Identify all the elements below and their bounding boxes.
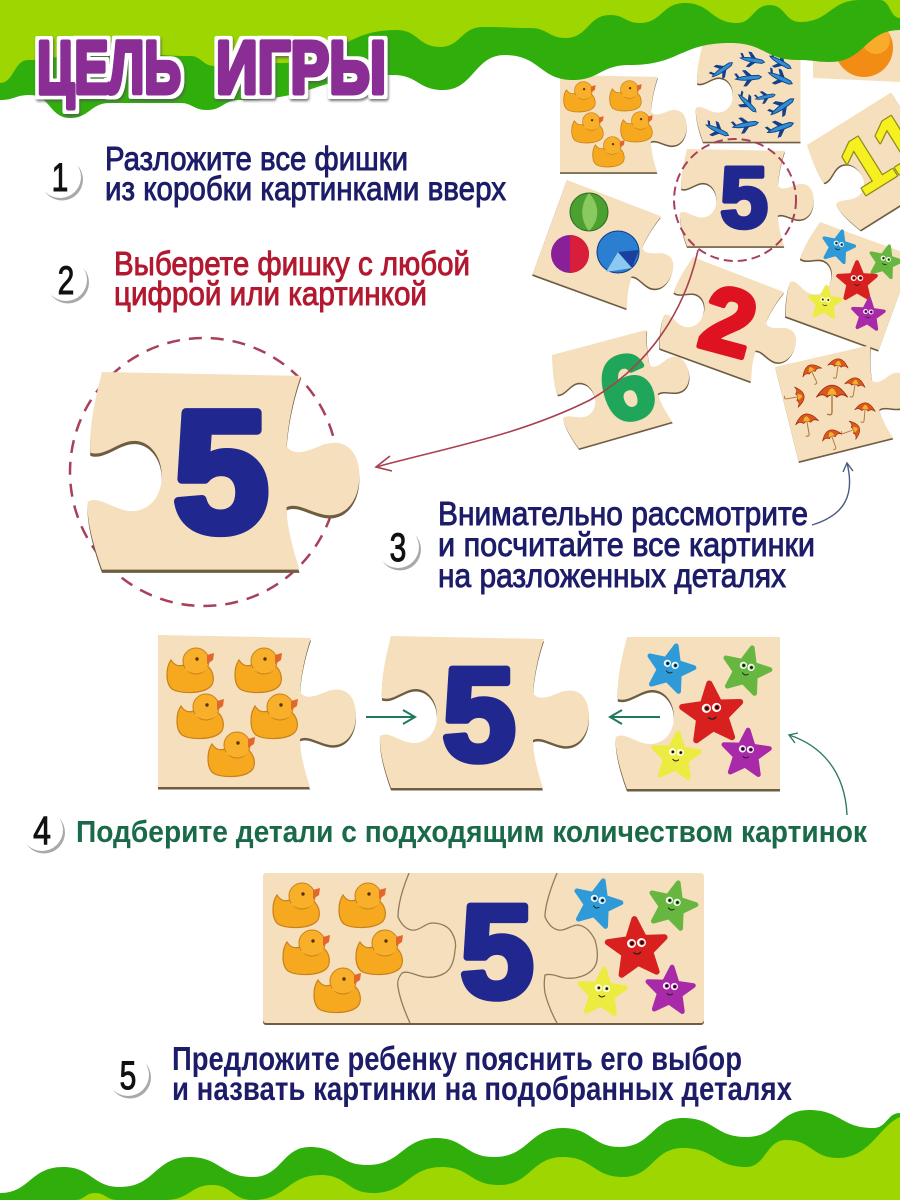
curved arrow to starfish piece bbox=[789, 733, 847, 815]
step 1 text: из коробки картинками вверх bbox=[105, 170, 506, 207]
step 2 bbox=[45, 245, 470, 312]
puzzle piece: airplanes bbox=[696, 43, 800, 143]
step 5 bbox=[107, 1040, 793, 1107]
puzzle piece: number 6 bbox=[545, 320, 701, 452]
arrow left bbox=[610, 710, 660, 724]
title: ЦЕЛЬ bbox=[37, 26, 181, 109]
number 5 piece: 5 bbox=[442, 641, 516, 788]
step 4 number badge: 4 bbox=[33, 808, 51, 853]
puzzle piece: highlighted number 5: 5 bbox=[720, 150, 768, 246]
step 1 text bbox=[105, 140, 506, 207]
enlarged puzzle piece with number 5 bbox=[88, 372, 359, 573]
duck piece bbox=[158, 635, 356, 790]
step 2 text: цифрой или картинкой bbox=[114, 275, 427, 312]
top wave: light green bbox=[0, 0, 900, 83]
puzzle piece: five starfish bbox=[778, 219, 900, 352]
title bbox=[37, 26, 386, 109]
step 1 number badge bbox=[39, 156, 83, 200]
step 1 number badge: 1 bbox=[52, 156, 68, 200]
step 3 text bbox=[438, 495, 815, 594]
starfish piece bbox=[616, 637, 780, 792]
puzzle piece: five ducks bbox=[560, 75, 687, 174]
step 1 bbox=[39, 140, 506, 207]
puzzle piece: orange ball bbox=[813, 19, 900, 82]
step 2 number badge: 2 bbox=[58, 259, 74, 303]
step 5 text: и назвать картинки на подобранных деталях bbox=[172, 1070, 793, 1107]
bottom wave: dark green bbox=[0, 1110, 900, 1200]
assembled puzzle: 5 bbox=[460, 878, 534, 1025]
puzzle piece: highlighted number 5 bbox=[680, 149, 814, 248]
top wave: dark green bbox=[0, 0, 900, 118]
puzzle piece: three balls bbox=[532, 180, 690, 321]
step 5 number badge: 5 bbox=[120, 1054, 136, 1098]
step 5 text bbox=[172, 1040, 793, 1107]
dashed highlight circle small bbox=[674, 139, 796, 261]
step 5 text: Предложите ребенку пояснить его выбор bbox=[172, 1040, 742, 1077]
arrow right bbox=[366, 710, 415, 724]
number 5 piece bbox=[380, 636, 589, 790]
small arrow to umbrella piece bbox=[812, 463, 853, 525]
step 3 text: Внимательно рассмотрите bbox=[438, 495, 808, 532]
step 2 number badge bbox=[45, 259, 89, 304]
bottom wave: light green bbox=[75, 1117, 900, 1200]
step 1 text: Разложите все фишки bbox=[105, 140, 408, 177]
assembled puzzle bbox=[263, 873, 704, 1025]
puzzle piece: number 6: 6 bbox=[590, 334, 665, 444]
title: ИГРЫ bbox=[216, 26, 386, 109]
puzzle piece: umbrellas bbox=[775, 336, 900, 463]
step 3 number badge bbox=[377, 526, 421, 570]
step 3 text: на разложенных деталях bbox=[438, 557, 786, 594]
puzzle piece: number 2 bbox=[652, 255, 812, 393]
step 4 bbox=[21, 808, 867, 854]
curved red arrow to enlarged piece bbox=[376, 250, 698, 471]
step 3 number badge: 3 bbox=[390, 526, 406, 570]
step 2 text: Выберете фишку с любой bbox=[114, 245, 470, 282]
step 2 text bbox=[114, 245, 470, 312]
enlarged puzzle piece with number 5: 5 bbox=[173, 376, 269, 568]
puzzle piece: number 11 bbox=[801, 93, 900, 235]
step 3 text: и посчитайте все картинки bbox=[438, 526, 815, 563]
step 3 bbox=[377, 495, 815, 594]
dashed highlight circle large bbox=[70, 338, 338, 606]
step 5 number badge bbox=[107, 1054, 151, 1098]
step 4 number badge bbox=[21, 808, 65, 854]
row: three separate pieces bbox=[158, 635, 780, 792]
puzzle piece: number 2: 2 bbox=[691, 266, 766, 378]
